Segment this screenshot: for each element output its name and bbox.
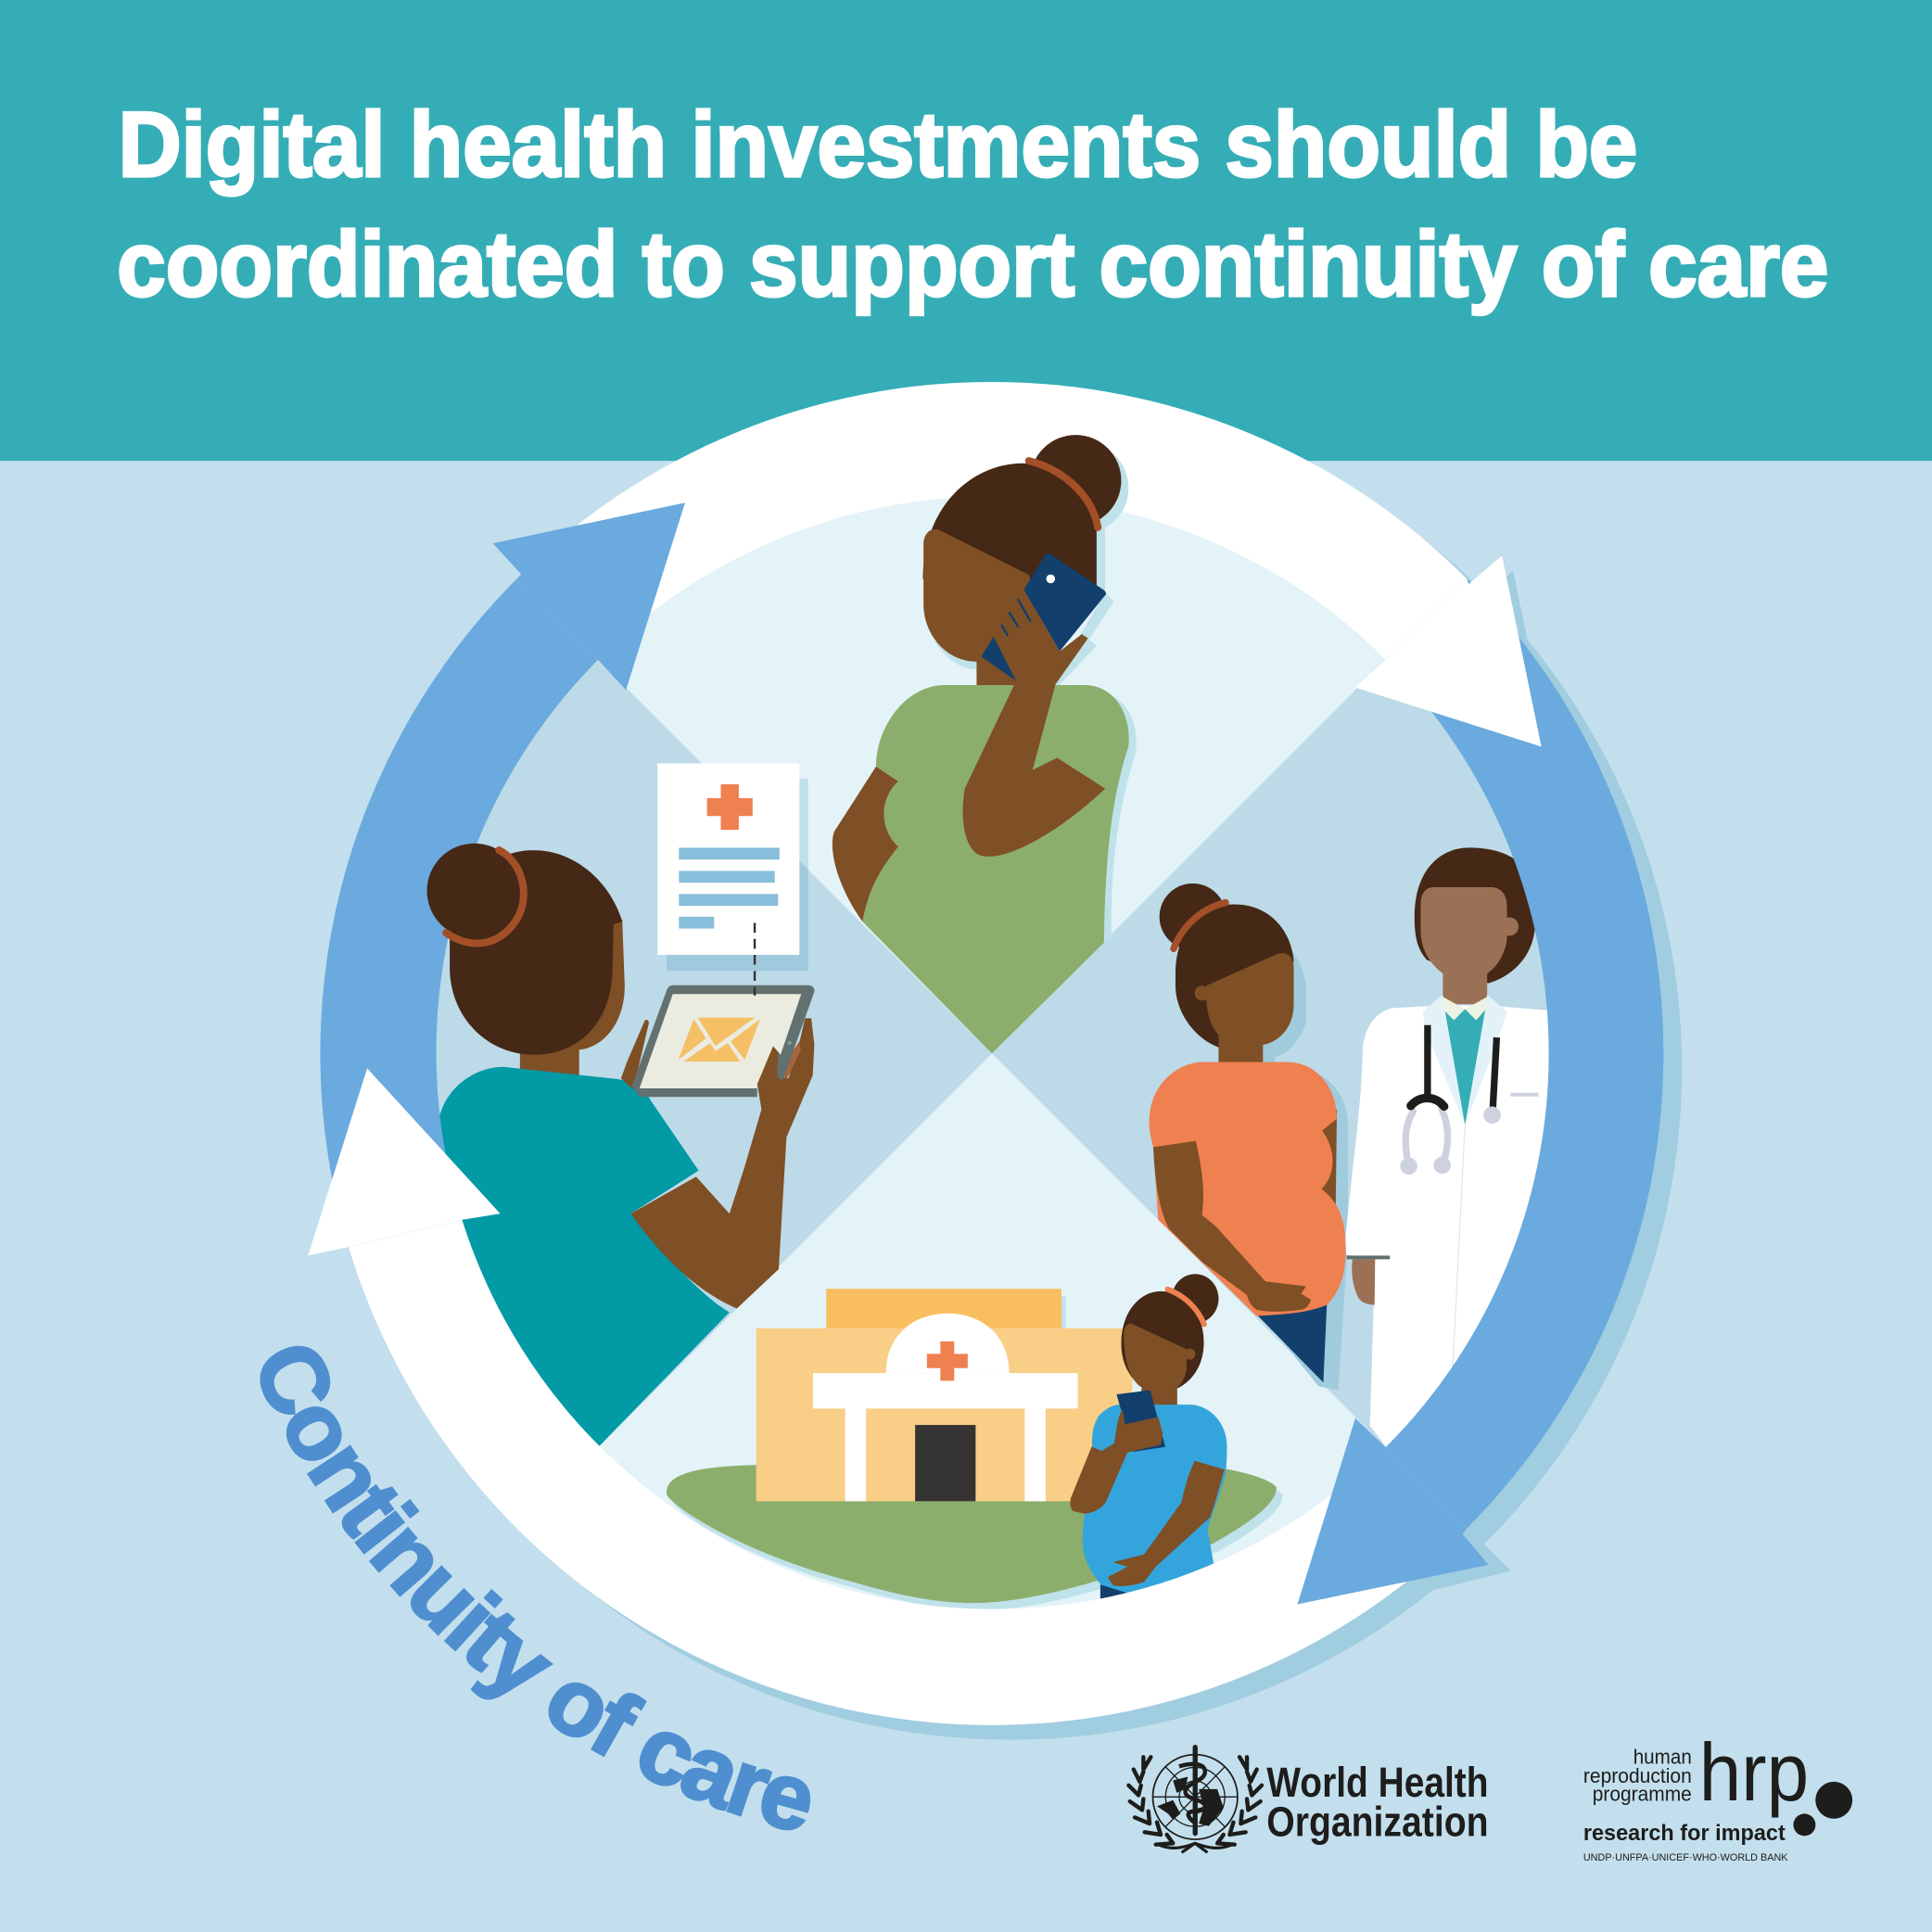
cuff: [1347, 1256, 1390, 1259]
paper: [657, 763, 799, 955]
tablet: [621, 985, 815, 1097]
hair: [1121, 1291, 1204, 1389]
face edge: [548, 919, 625, 1049]
medical document: [657, 763, 808, 971]
arrowhead: top left blue: [493, 502, 685, 690]
title: Digital health investments should be: [119, 94, 1637, 197]
arm and hand: [630, 1018, 814, 1308]
progress ring: [308, 382, 1663, 1725]
tablet screen: [640, 994, 801, 1088]
ear: [1500, 918, 1519, 935]
face and neck: [923, 529, 1041, 688]
left blue arc: [320, 578, 598, 1247]
raised arm and hand: [963, 590, 1105, 857]
hair: [1415, 847, 1535, 984]
WHO wordmark: World Health: [1266, 1759, 1489, 1806]
ground shadow: [673, 1472, 1283, 1610]
woman in orange shirt: [1150, 883, 1348, 1390]
headband: [1168, 1290, 1204, 1324]
top white arc: [517, 382, 1467, 660]
header band: [0, 0, 1932, 461]
hair: [922, 464, 1097, 594]
globe: [1152, 1755, 1238, 1839]
finger behind tablet: [780, 1042, 801, 1080]
woman on phone: [833, 435, 1137, 1053]
hand: [1352, 1259, 1375, 1304]
phone: [1023, 553, 1106, 652]
woman in teal: head: [427, 844, 625, 1055]
document shadow: [667, 779, 808, 971]
ring shadow: [338, 397, 1682, 1740]
bun: [427, 844, 522, 938]
red cross: [707, 784, 753, 830]
continuity of care label: Continuity of care: [260, 1346, 810, 1830]
staff: [1193, 1748, 1197, 1834]
small pregnant woman with phone: [1070, 1274, 1227, 1602]
arm and hand holding phone: [1070, 1409, 1163, 1514]
hair: [450, 850, 622, 1055]
bun: [1030, 435, 1121, 527]
collar: [1443, 997, 1465, 1020]
serpent: [1179, 1764, 1205, 1824]
WHO emblem: [1128, 1748, 1262, 1852]
teal shirt: [438, 1067, 730, 1446]
HRP logo: UNDP·UNFPA·UNICEF·WHO·WORLD BANK: [1583, 1852, 1788, 1863]
bun shadow: [1037, 442, 1128, 533]
hair: [1176, 905, 1294, 1048]
HRP logo: hrp: [1699, 1727, 1809, 1818]
ear and face: [1195, 985, 1209, 1000]
fingers: [1001, 599, 1031, 636]
back arm: [1318, 1109, 1337, 1210]
inner disk with quadrants: [435, 497, 1549, 1610]
left laurel: [1128, 1757, 1173, 1845]
headband: [1029, 461, 1098, 527]
tablet button: [788, 1041, 792, 1045]
hospital scene: [667, 1289, 1283, 1610]
title: [117, 94, 1828, 316]
teal shirt: [1443, 1010, 1487, 1125]
headband: [446, 850, 524, 944]
neck: [520, 1048, 579, 1078]
dashed connector: [754, 922, 756, 996]
green shirt: [862, 685, 1129, 1053]
phone and hand shadow: [1048, 592, 1113, 685]
HRP logo: human: [1633, 1746, 1692, 1769]
HRP logo: reproduction: [1583, 1764, 1692, 1787]
lapels: [1423, 995, 1465, 1125]
phone: [1116, 1390, 1165, 1452]
coat seam: [1453, 1125, 1465, 1367]
HRP logo: [1583, 1727, 1852, 1863]
arm on belly: [1108, 1461, 1225, 1586]
HRP logo: research for impact: [1583, 1821, 1786, 1846]
ground: [667, 1465, 1277, 1603]
jeans: [1100, 1584, 1139, 1600]
shirt shadow: [1085, 690, 1137, 943]
jeans: [1255, 1302, 1327, 1382]
white coat: [1345, 1006, 1571, 1448]
arrowhead: top right white: [1355, 555, 1542, 746]
face shadow: [934, 641, 980, 669]
WHO wordmark: Organization: [1266, 1798, 1489, 1845]
face: [1420, 887, 1506, 1004]
ear and face: [1185, 1349, 1195, 1360]
shadow: [1210, 920, 1348, 1390]
stethoscope: [1400, 1025, 1501, 1175]
front arm: [1153, 1141, 1311, 1312]
back arm: [833, 767, 902, 922]
title: coordinated to support continuity of care: [117, 213, 1828, 316]
HRP logo: programme: [1593, 1782, 1692, 1805]
bun: [1172, 1274, 1218, 1323]
blue dress: [1083, 1405, 1227, 1602]
WHO wordmark: [1266, 1759, 1489, 1845]
headband: [1174, 903, 1226, 948]
ribbon: [1160, 1843, 1231, 1852]
bun: [1160, 883, 1226, 950]
tablet frame: [632, 985, 815, 1097]
woman in teal: body: [438, 1018, 814, 1446]
hospital building: [756, 1289, 1132, 1501]
bottom white arc: [349, 1220, 1467, 1725]
doctor: [1345, 847, 1571, 1448]
text lines: [679, 847, 780, 929]
arrowhead: left white: [308, 1068, 501, 1255]
envelope: [679, 1018, 760, 1061]
orange shirt: [1150, 1062, 1346, 1316]
pocket: [1510, 1093, 1538, 1096]
hair shadow: [1085, 517, 1105, 602]
right blue arc: [1386, 578, 1663, 1529]
arrowhead: bottom right blue: [1298, 1418, 1489, 1604]
left hand behind tablet: [621, 1020, 649, 1089]
right laurel: [1217, 1757, 1262, 1845]
